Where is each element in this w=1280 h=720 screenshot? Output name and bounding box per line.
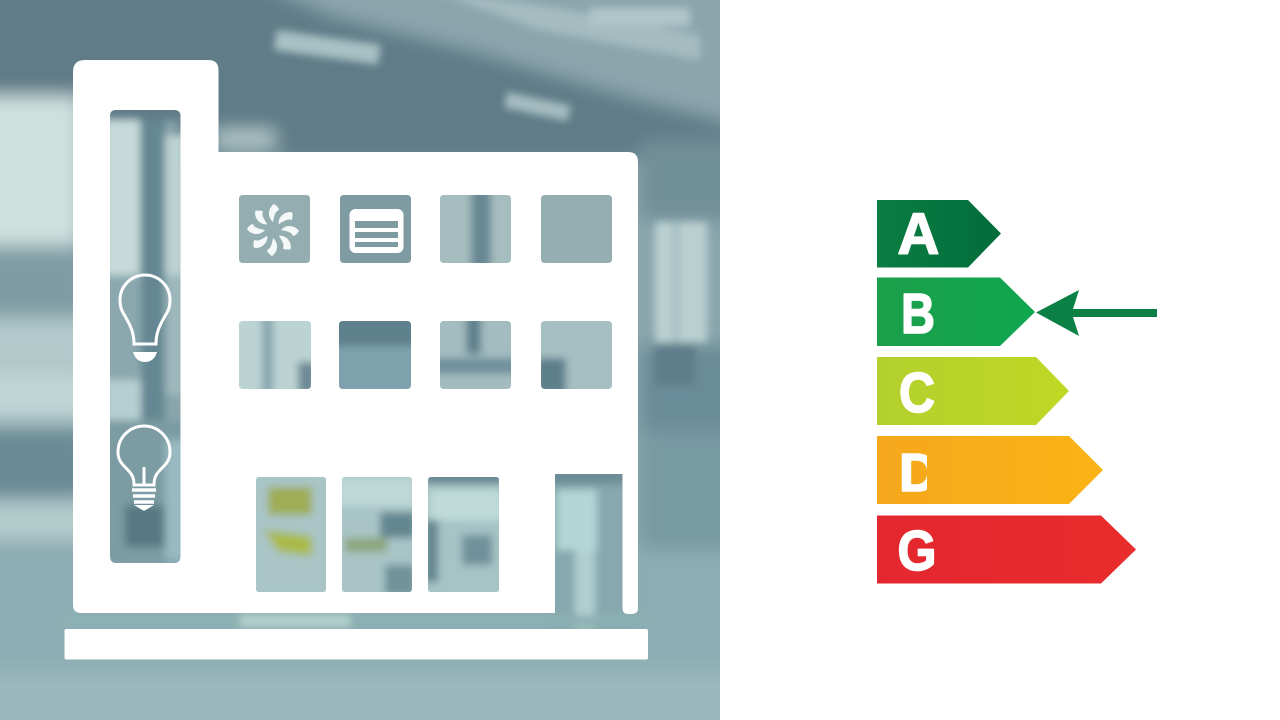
rating bar C <box>877 357 1069 425</box>
door <box>545 466 635 636</box>
rating bar C: C <box>899 361 935 425</box>
panel: blurred office photo background <box>0 0 770 720</box>
arrow pointing to rating B <box>1036 290 1157 336</box>
base plate of building <box>64 629 648 660</box>
rating bar B <box>877 278 1035 346</box>
icon: ventilation fan <box>247 204 299 256</box>
building silhouette with window cut-outs <box>73 60 638 614</box>
row 2 <box>239 321 311 389</box>
rating bar B: B <box>901 282 935 346</box>
rating bar G: G <box>898 519 936 583</box>
rating bar G <box>877 516 1136 584</box>
icon: light bulb (outline) <box>120 275 170 362</box>
rating bar D: D <box>899 443 938 503</box>
rating bar A <box>877 200 1001 268</box>
chart: energy efficiency rating scale <box>877 200 1157 584</box>
icon: air vent unit <box>350 209 404 253</box>
rating bar A: A <box>898 202 939 267</box>
icon: LED light bulb <box>118 426 170 511</box>
rating bar D <box>877 436 1103 504</box>
row 3 <box>256 477 326 592</box>
slot backdrop <box>105 105 141 275</box>
row 1 <box>239 195 310 263</box>
